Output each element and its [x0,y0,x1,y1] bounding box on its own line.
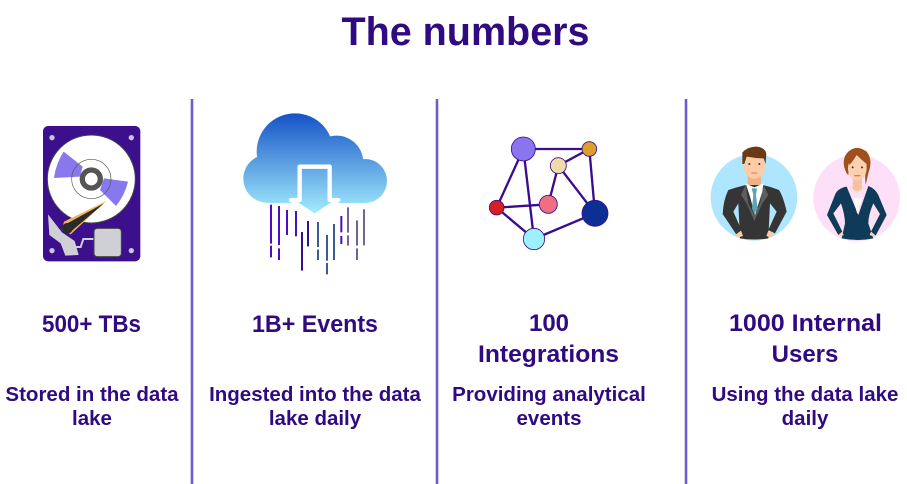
description: events [517,407,581,430]
stat: 1000 Internal Users: Users [772,341,838,368]
stat: 500+ TBs: 500+ TBs [42,311,141,338]
stat: 1B+ Events [209,311,422,430]
icon: cloud download [243,113,387,274]
description: Using the data lake [712,383,898,406]
data rain [271,205,364,274]
description: Stored in the data [5,383,179,406]
description: daily [782,407,829,430]
icon: integrations network [489,137,608,250]
description: lake [72,407,112,430]
icon: male user [711,147,797,241]
stat: 1B+ Events: 1B+ Events [252,311,378,338]
divider lines [192,99,686,484]
description: Providing analytical [452,383,646,406]
title: The numbers [341,10,590,54]
download arrow [291,167,338,216]
stat: 500+ TBs [5,311,179,430]
icon: hard drive [43,126,140,261]
stat: 100 Integrations: Integrations [478,341,619,368]
stat: 1000 Internal Users [712,310,898,430]
stat: 100 Integrations [452,310,646,430]
description: lake daily [269,407,362,430]
icon: female user [813,148,900,241]
stat: 100 Integrations: 100 [529,310,569,337]
description: Ingested into the data [209,383,422,406]
stat: 1000 Internal Users: 1000 Internal [729,310,882,337]
